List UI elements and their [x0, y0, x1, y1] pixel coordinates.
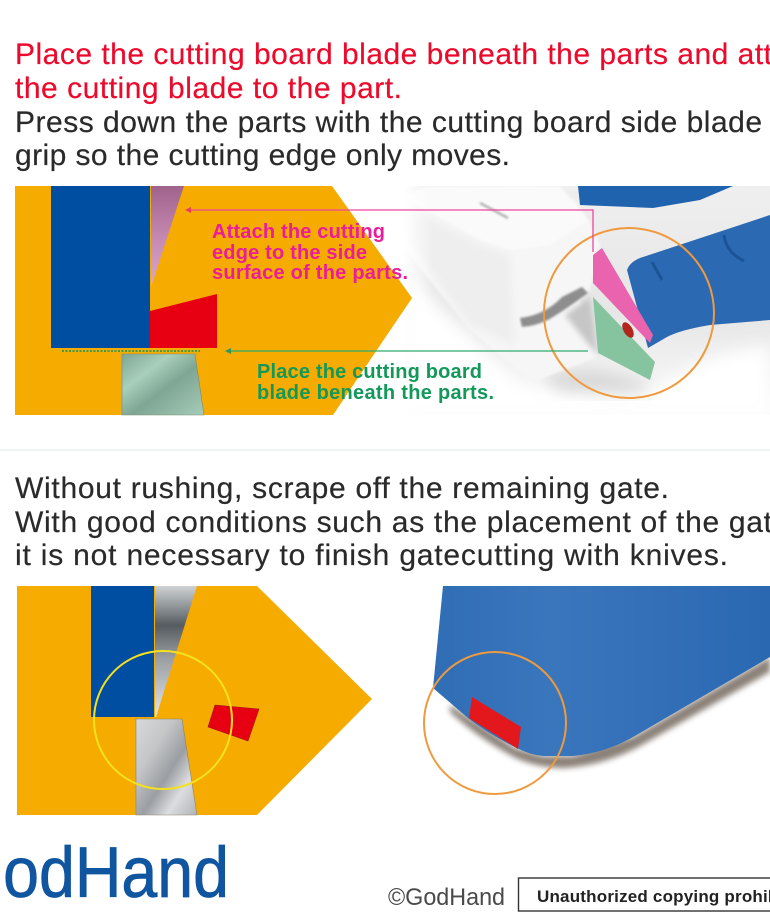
- pink callout label: [212, 221, 408, 284]
- red gate mark: [469, 697, 521, 749]
- heading: step two instructions: Without rushing, scrape off the remaining gate.: [15, 472, 669, 505]
- red gate: [150, 294, 217, 348]
- heading: step two instructions: it is not necessary to finish gatecutting with knives.: [15, 539, 728, 572]
- diagram: scraping the gate: [17, 586, 372, 815]
- notice box: unauthorized copying: [518, 878, 770, 911]
- photo: finished part: [424, 586, 770, 794]
- heading: step two instructions: With good conditions such as the placement of the gat: [15, 506, 770, 539]
- part shadow: [450, 657, 770, 768]
- blue tool handle: [627, 215, 770, 348]
- pink side blade: [151, 186, 184, 287]
- orange highlight circle: [544, 228, 714, 398]
- yellow highlight circle: [94, 651, 232, 789]
- green board blade: [593, 297, 655, 380]
- white part: [425, 218, 599, 376]
- photo: tool and part close-up: [403, 186, 770, 415]
- green dashed contact line: [62, 350, 200, 352]
- blue tool upper: [578, 186, 733, 208]
- pink blade: [593, 248, 653, 343]
- red gate remnant: [622, 322, 634, 338]
- pink callout label: edge to the side: [212, 242, 367, 264]
- pink callout label: Attach the cutting: [212, 221, 385, 243]
- heading: step two instructions: [15, 472, 770, 572]
- green callout label: blade beneath the parts.: [257, 382, 494, 404]
- pink leader arrow: [185, 207, 593, 252]
- blue part body: [433, 586, 770, 756]
- green callout label: Place the cutting board: [257, 361, 482, 383]
- lower grey blade: [136, 719, 197, 815]
- green leader arrow: [225, 348, 588, 354]
- red cut gate: [208, 705, 259, 741]
- heading: step one instructions: grip so the cutting edge only moves.: [15, 139, 510, 172]
- copyright mark: ©GodHand: [388, 884, 505, 911]
- green board blade: [122, 354, 204, 415]
- upper grey blade: [155, 586, 197, 717]
- blue part: [91, 586, 154, 717]
- orange gate background: [15, 186, 412, 415]
- orange gate background: [17, 586, 372, 815]
- orange highlight circle: [424, 652, 566, 794]
- heading: step one instructions: [15, 38, 770, 172]
- heading: step one instructions: Place the cutting board blade beneath the parts and att: [15, 38, 770, 71]
- divider: [0, 449, 770, 451]
- diagram: blade placement: [15, 186, 412, 415]
- heading: step one instructions: Press down the parts with the cutting board side blade: [15, 106, 762, 139]
- heading: step one instructions: the cutting blade to the part.: [15, 72, 402, 105]
- green callout label: [257, 361, 494, 404]
- blue part: [51, 186, 150, 348]
- pink callout label: surface of the parts.: [212, 262, 408, 284]
